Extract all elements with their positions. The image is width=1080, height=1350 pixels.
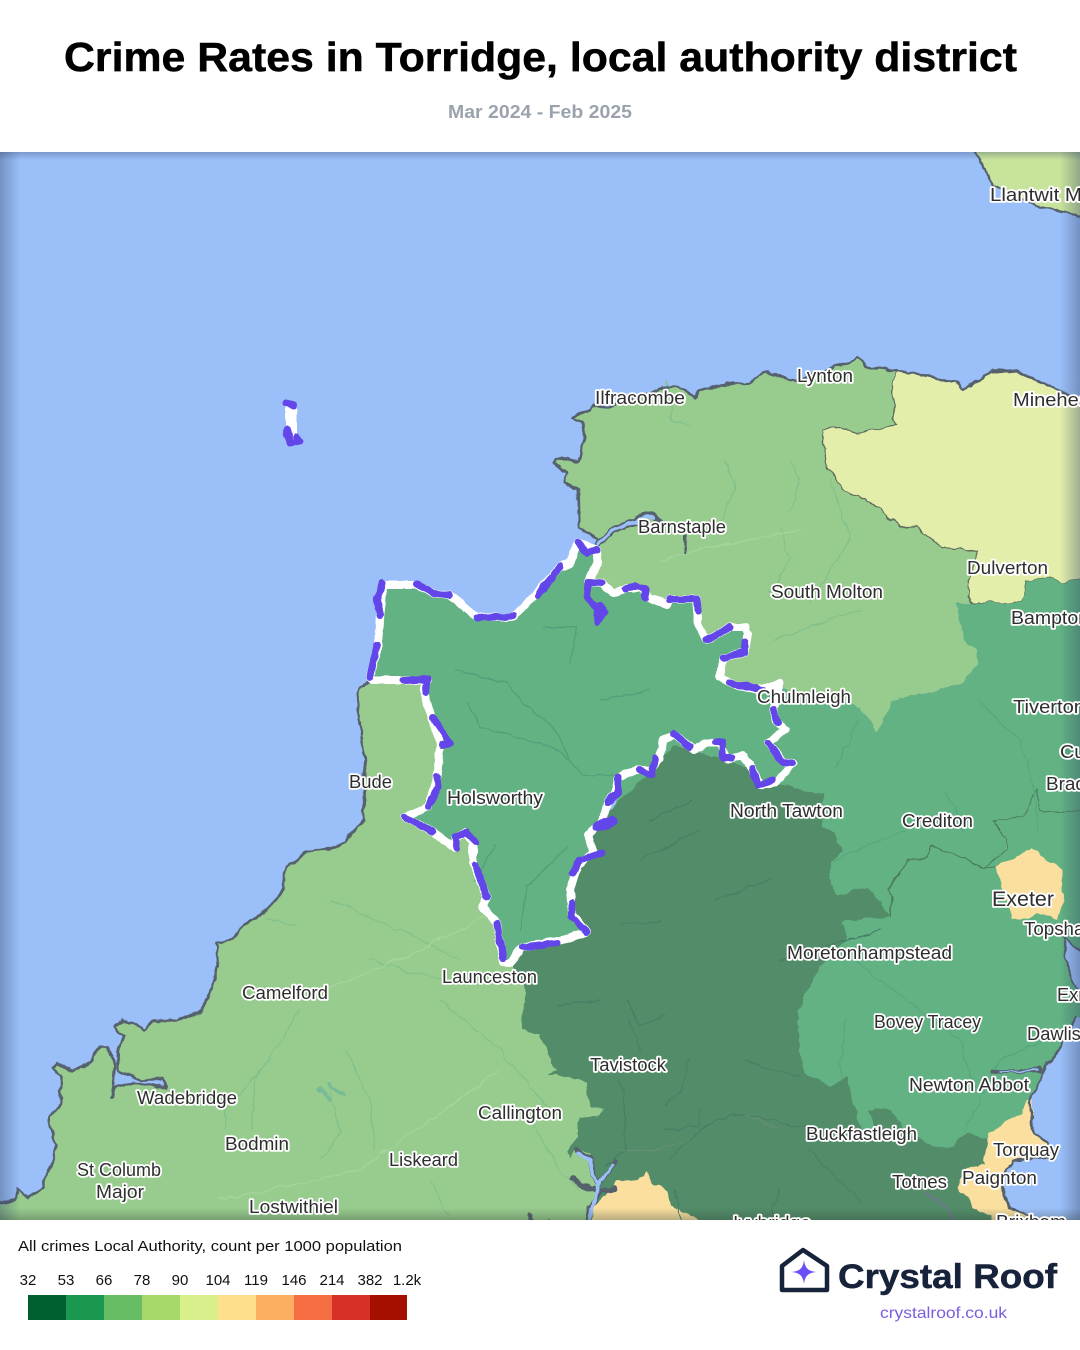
legend [18, 1238, 422, 1320]
place name labels: Major [96, 1181, 144, 1202]
legend colour bar [28, 1295, 407, 1320]
estuary: Dart [924, 1190, 956, 1220]
place name labels: Launceston [442, 966, 537, 987]
estuary: Tamar and Plymouth Sound [527, 1147, 618, 1220]
place name labels: Brixham [996, 1211, 1066, 1232]
region: Exeter, peach [995, 850, 1063, 920]
place name labels: Callington [478, 1102, 562, 1123]
place name labels: Newton Abbot [909, 1074, 1029, 1095]
Torridge district [286, 403, 793, 963]
legend scale values: 214 [319, 1272, 345, 1289]
legend scale values: 146 [281, 1272, 307, 1289]
place name labels: Buckfastleigh [806, 1123, 917, 1144]
place name labels: Tavistock [590, 1054, 667, 1075]
Torridge boundary: thick purple section [598, 822, 612, 826]
Torridge boundary: purple dashes [370, 542, 792, 958]
place name labels: Bodmin [225, 1133, 289, 1154]
legend scale values: 53 [58, 1272, 74, 1289]
legend scale values: 104 [205, 1272, 231, 1289]
legend scale values: 32 [20, 1272, 36, 1289]
wordmark: Crystal Roof [838, 1258, 1058, 1296]
place name labels: Exeter [992, 887, 1054, 911]
legend scale values: 1.2k [393, 1272, 422, 1289]
legend scale values: 78 [134, 1272, 150, 1289]
title: Crime Rates in Torridge, local authority district [64, 34, 1017, 80]
Torridge rivers [455, 627, 650, 930]
place name labels: Lostwithiel [249, 1196, 338, 1217]
place name labels: Crediton [902, 810, 973, 831]
legend scale values: 66 [96, 1272, 112, 1289]
region: West Devon and South Hams, dark green [512, 745, 992, 1235]
region: South Wales coast [968, 140, 1080, 217]
place name labels: Tiverton [1013, 696, 1080, 717]
estuary: Exe [1063, 936, 1080, 990]
region: Somerset West, pale yellow [823, 370, 1080, 603]
Torridge: filled area [370, 542, 793, 963]
place name labels: Chulmleigh [757, 686, 851, 707]
place name labels: Torquay [993, 1139, 1060, 1160]
place name labels [77, 184, 1080, 1233]
place name labels: St Columb [77, 1159, 161, 1180]
place name labels: Liskeard [389, 1149, 458, 1170]
place name labels: Camelford [242, 982, 328, 1003]
place name labels: Totnes [892, 1171, 947, 1192]
region: Mid, East Devon and Teignbridge, mid green [600, 577, 1080, 1235]
place name labels: Paignton [962, 1167, 1037, 1188]
icon: house with star [782, 1250, 827, 1290]
place name labels: Wadebridge [137, 1087, 237, 1108]
legend scale values: 90 [172, 1272, 188, 1289]
place name labels: North Tawton [730, 800, 843, 821]
legend scale values: 119 [244, 1272, 268, 1289]
legend title: All crimes Local Authority, count per 1000 population [18, 1238, 402, 1255]
website: crystalroof.co.uk [880, 1305, 1008, 1322]
place name labels: Holsworthy [447, 787, 544, 808]
logo: Crystal Roof [782, 1250, 1058, 1322]
legend scale values [20, 1272, 422, 1289]
coastline: Cornwall [0, 680, 372, 1202]
region: North Devon, light green [553, 357, 1000, 732]
coastline: North Devon and Somerset [553, 357, 1080, 540]
sea [0, 152, 1080, 1220]
district boundaries and rivers [220, 380, 1080, 1220]
region: Torbay, peach [957, 1100, 1052, 1220]
Torridge: Lundy island [286, 403, 300, 443]
Torridge boundary: white outline [370, 542, 793, 963]
estuary: Taw [598, 516, 660, 543]
region: Plymouth, peach [592, 1171, 699, 1220]
place name labels: Barnstaple [638, 516, 726, 537]
estuary: Teign [993, 1070, 1040, 1072]
coastline: South Devon [1002, 1017, 1077, 1235]
place name labels: South Molton [771, 581, 883, 602]
place name labels: Lynton [797, 365, 853, 386]
place name labels: Dulverton [967, 557, 1048, 578]
map edge shading [0, 152, 1080, 1220]
legend scale values: 382 [357, 1272, 383, 1289]
place name labels: Ivybridge [733, 1212, 811, 1233]
subtitle: date range: Mar 2024 - Feb 2025 [448, 101, 632, 122]
place name labels: Moretonhampstead [787, 942, 952, 963]
place name labels: Bovey Tracey [874, 1011, 982, 1032]
region: Cornwall and Bude, light green [0, 680, 620, 1235]
place name labels: Ilfracombe [595, 387, 685, 408]
place name labels: Bude [349, 771, 392, 792]
